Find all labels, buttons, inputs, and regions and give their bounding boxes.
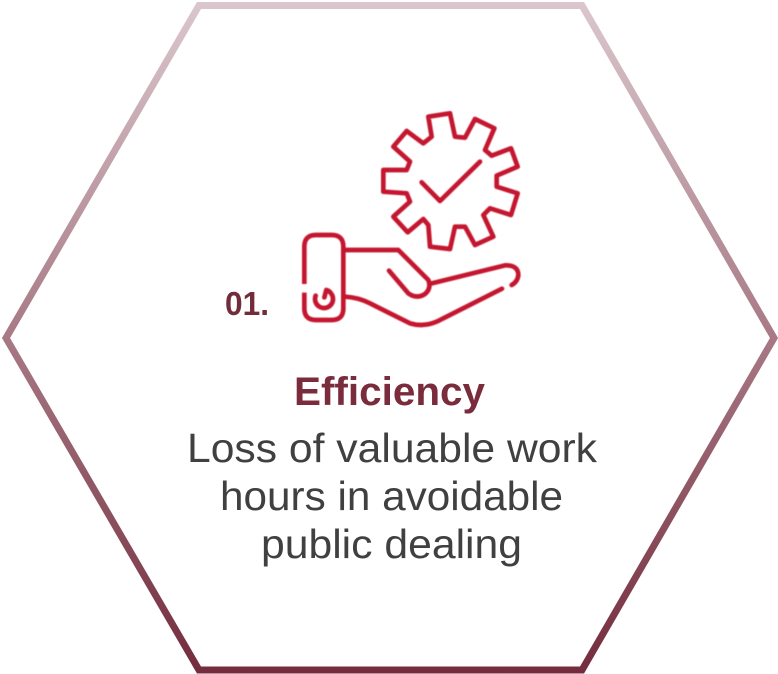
text block: description: Loss of valuable work	[187, 425, 598, 471]
icon: check mark	[422, 162, 480, 201]
heading: Efficiency	[294, 370, 486, 414]
text block: description	[187, 425, 598, 567]
icon: gear	[383, 113, 518, 249]
icon: hand	[304, 235, 518, 325]
text block: description: hours in avoidable	[220, 473, 563, 519]
number label: 01.	[225, 285, 269, 322]
text block: description: public dealing	[261, 521, 522, 567]
icon: hand holding gear with check mark	[304, 113, 518, 325]
